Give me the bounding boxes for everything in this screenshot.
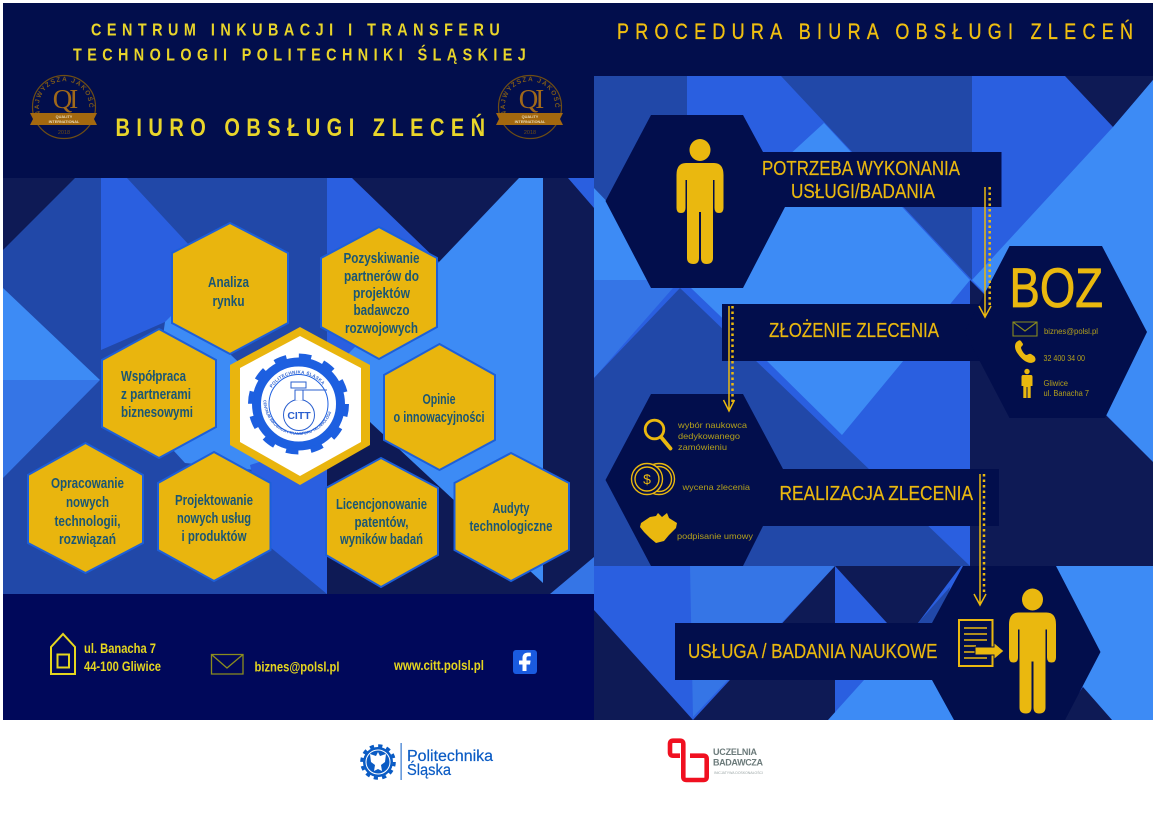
panel: left poster	[3, 3, 594, 720]
hexagon: Audyty	[454, 453, 569, 581]
hexagon: Pozyskiwanie partnerów: rozwojowych	[345, 321, 418, 337]
hexagon: Opracowanie: nowych	[66, 495, 109, 511]
arrow: need to BOZ and order	[979, 187, 991, 317]
icon: quality badge right: NAJWYŻSZA JAKOŚĆ	[500, 76, 561, 113]
hexagon: Opracowanie	[28, 443, 143, 573]
hexagon: Współpraca	[102, 329, 216, 458]
contact phone: 32 400 34 00	[1044, 353, 1085, 363]
step 1: need for service	[606, 115, 1002, 288]
website: www.citt.polsl.pl	[393, 657, 484, 673]
heading: organisation name	[73, 20, 526, 65]
hexagon: Pozyskiwanie partnerów: badawczo	[354, 303, 410, 319]
logo: Politechnika Śląska: Śląska	[407, 761, 451, 779]
step 2 bar: placing the order	[722, 304, 990, 361]
icon: person	[1009, 588, 1056, 714]
BOZ heading: BOZ	[1010, 256, 1103, 319]
logo: Uczelnia Badawcza: BADAWCZA	[713, 758, 764, 768]
step 1 label: USŁUGI/BADANIA	[791, 180, 935, 203]
icon: quality badge right: QUALITY	[522, 115, 539, 119]
icon: handshake	[640, 513, 677, 543]
hexagon: Projektowanie: nowych usług	[177, 511, 251, 527]
panel: right poster	[594, 3, 1153, 720]
step 2 bar: placing the order: ZŁOŻENIE ZLECENIA	[769, 319, 939, 342]
hexagon: Audyty: Audyty	[492, 501, 530, 517]
text: choosing a scientist: dedykowanego	[678, 431, 740, 441]
right geometric background	[594, 76, 1153, 720]
hexagon: Opracowanie: Opracowanie	[51, 476, 124, 492]
hexagon: Opinie o innowacyjności	[384, 344, 495, 470]
hexagon: Opracowanie: technologii,	[54, 514, 120, 530]
centre hexagon with CITT logo	[230, 327, 370, 485]
logo: Politechnika Śląska: Politechnika	[407, 748, 493, 765]
text: pricing: wycena zlecenia	[681, 482, 750, 492]
step 3 label: REALIZACJA ZLECENIA	[780, 482, 973, 505]
heading: office name: BIURO OBSŁUGI ZLECEŃ	[116, 114, 485, 142]
icon: phone	[1015, 340, 1036, 363]
icon: quality badge left: NAJWYŻSZA JAKOŚĆ	[34, 76, 95, 113]
text: choosing a scientist: zamówieniu	[678, 442, 727, 452]
icon: small person	[1022, 369, 1032, 398]
left geometric background	[3, 178, 594, 594]
icon: person	[676, 139, 724, 264]
hexagon: Audyty: technologiczne	[470, 519, 552, 535]
footer band	[3, 594, 594, 720]
hexagon: Analiza rynku: rynku	[212, 294, 244, 310]
icon: envelope	[212, 654, 243, 674]
arrow: order to fulfilment	[724, 306, 734, 411]
contact email: biznes@polsl.pl	[1044, 326, 1098, 336]
step 4: service delivered	[675, 566, 1100, 720]
icon: coins	[632, 464, 674, 494]
hexagon: Współpraca: Współpraca	[121, 369, 187, 385]
icon: quality badge left: 2018	[58, 130, 70, 136]
icon: quality badge left: QUALITY	[56, 115, 73, 119]
text: choosing a scientist: wybór naukowca	[677, 420, 747, 430]
hexagon: Licencjonowanie: Licencjonowanie	[336, 497, 427, 513]
icon: magnifier	[645, 420, 670, 448]
icon: quality badge left: QI	[53, 84, 78, 114]
address: ul. Banacha 7	[84, 640, 156, 656]
text: signing contract: podpisanie umowy	[677, 531, 754, 541]
logo: Uczelnia Badawcza: INICJATYWA DOSKONAŁOŚCI	[714, 770, 763, 775]
hexagon: Opinie o innowacyjności: Opinie	[422, 392, 456, 408]
contact address: ul. Banacha 7	[1044, 388, 1089, 398]
arrow: fulfilment to service	[974, 474, 986, 605]
hexagon: Projektowanie	[158, 452, 270, 581]
hexagon: Współpraca: z partnerami	[121, 387, 191, 403]
address: 44-100 Gliwice	[84, 658, 161, 674]
hexagon: Projektowanie: Projektowanie	[175, 493, 253, 509]
hexagon: Współpraca: biznesowymi	[121, 405, 193, 421]
step 1 label	[762, 157, 960, 203]
logo: Politechnika Śląska	[362, 743, 493, 780]
heading: organisation name: TECHNOLOGII POLITECHNIKI ŚLĄSKIEJ	[73, 44, 526, 65]
hexagon: Pozyskiwanie partnerów: Pozyskiwanie	[344, 251, 420, 267]
icon: quality badge right: INTERNATIONAL	[515, 120, 546, 124]
hexagon: Analiza rynku: Analiza	[208, 275, 250, 291]
step 4 label: USŁUGA / BADANIA NAUKOWE	[688, 640, 938, 663]
contact address	[1044, 378, 1089, 398]
BOZ contact hexagon	[964, 246, 1147, 418]
hexagon: Pozyskiwanie partnerów: partnerów do	[344, 269, 419, 285]
hexagon: Licencjonowanie: wyników badań	[339, 532, 423, 548]
hexagon: Licencjonowanie	[326, 458, 438, 587]
header band	[594, 3, 1153, 76]
hexagon: Pozyskiwanie partnerów: projektów	[353, 286, 411, 302]
icon: quality badge right: QI	[519, 84, 544, 114]
icon: coins: $	[643, 471, 651, 487]
text: choosing a scientist	[677, 420, 747, 452]
icon: house	[51, 634, 75, 674]
email: biznes@polsl.pl	[254, 658, 340, 674]
step 1 label: POTRZEBA WYKONANIA	[762, 157, 960, 180]
contact address: Gliwice	[1044, 378, 1068, 388]
logo: Uczelnia Badawcza: UCZELNIA	[713, 747, 758, 757]
icon: facebook	[513, 650, 537, 674]
hexagon: Opracowanie: rozwiązań	[59, 532, 116, 548]
hexagon: Projektowanie: i produktów	[182, 529, 247, 545]
centre hexagon with CITT logo: POLITECHNIKA ŚLĄSKA	[270, 370, 324, 388]
icon: document with arrow	[959, 620, 1004, 666]
hexagon: Opinie o innowacyjności: o innowacyjności	[394, 410, 484, 426]
heading: procedure title: PROCEDURA BIURA OBSŁUGI ZLECEŃ	[617, 19, 1133, 45]
address	[84, 640, 161, 674]
logo: Uczelnia Badawcza	[670, 741, 764, 780]
icon: quality badge right	[496, 74, 563, 140]
icon: quality badge left	[30, 74, 97, 140]
hexagon: Licencjonowanie: patentów,	[354, 515, 408, 531]
icon: quality badge right: 2018	[524, 130, 536, 136]
centre hexagon with CITT logo: CENTRUM INKUBACJI I TRANSFERU TECHNOLOGII	[264, 400, 332, 435]
hexagon: Analiza rynku	[172, 223, 288, 354]
hexagon: Pozyskiwanie partnerów	[321, 227, 437, 359]
centre hexagon with CITT logo: CITT	[287, 410, 311, 422]
icon: quality badge left: INTERNATIONAL	[49, 120, 80, 124]
heading: organisation name: CENTRUM INKUBACJI I TRANSFERU	[91, 20, 500, 40]
step 3: order fulfilment	[606, 394, 999, 566]
icon: envelope	[1013, 322, 1037, 336]
header band	[3, 3, 594, 178]
